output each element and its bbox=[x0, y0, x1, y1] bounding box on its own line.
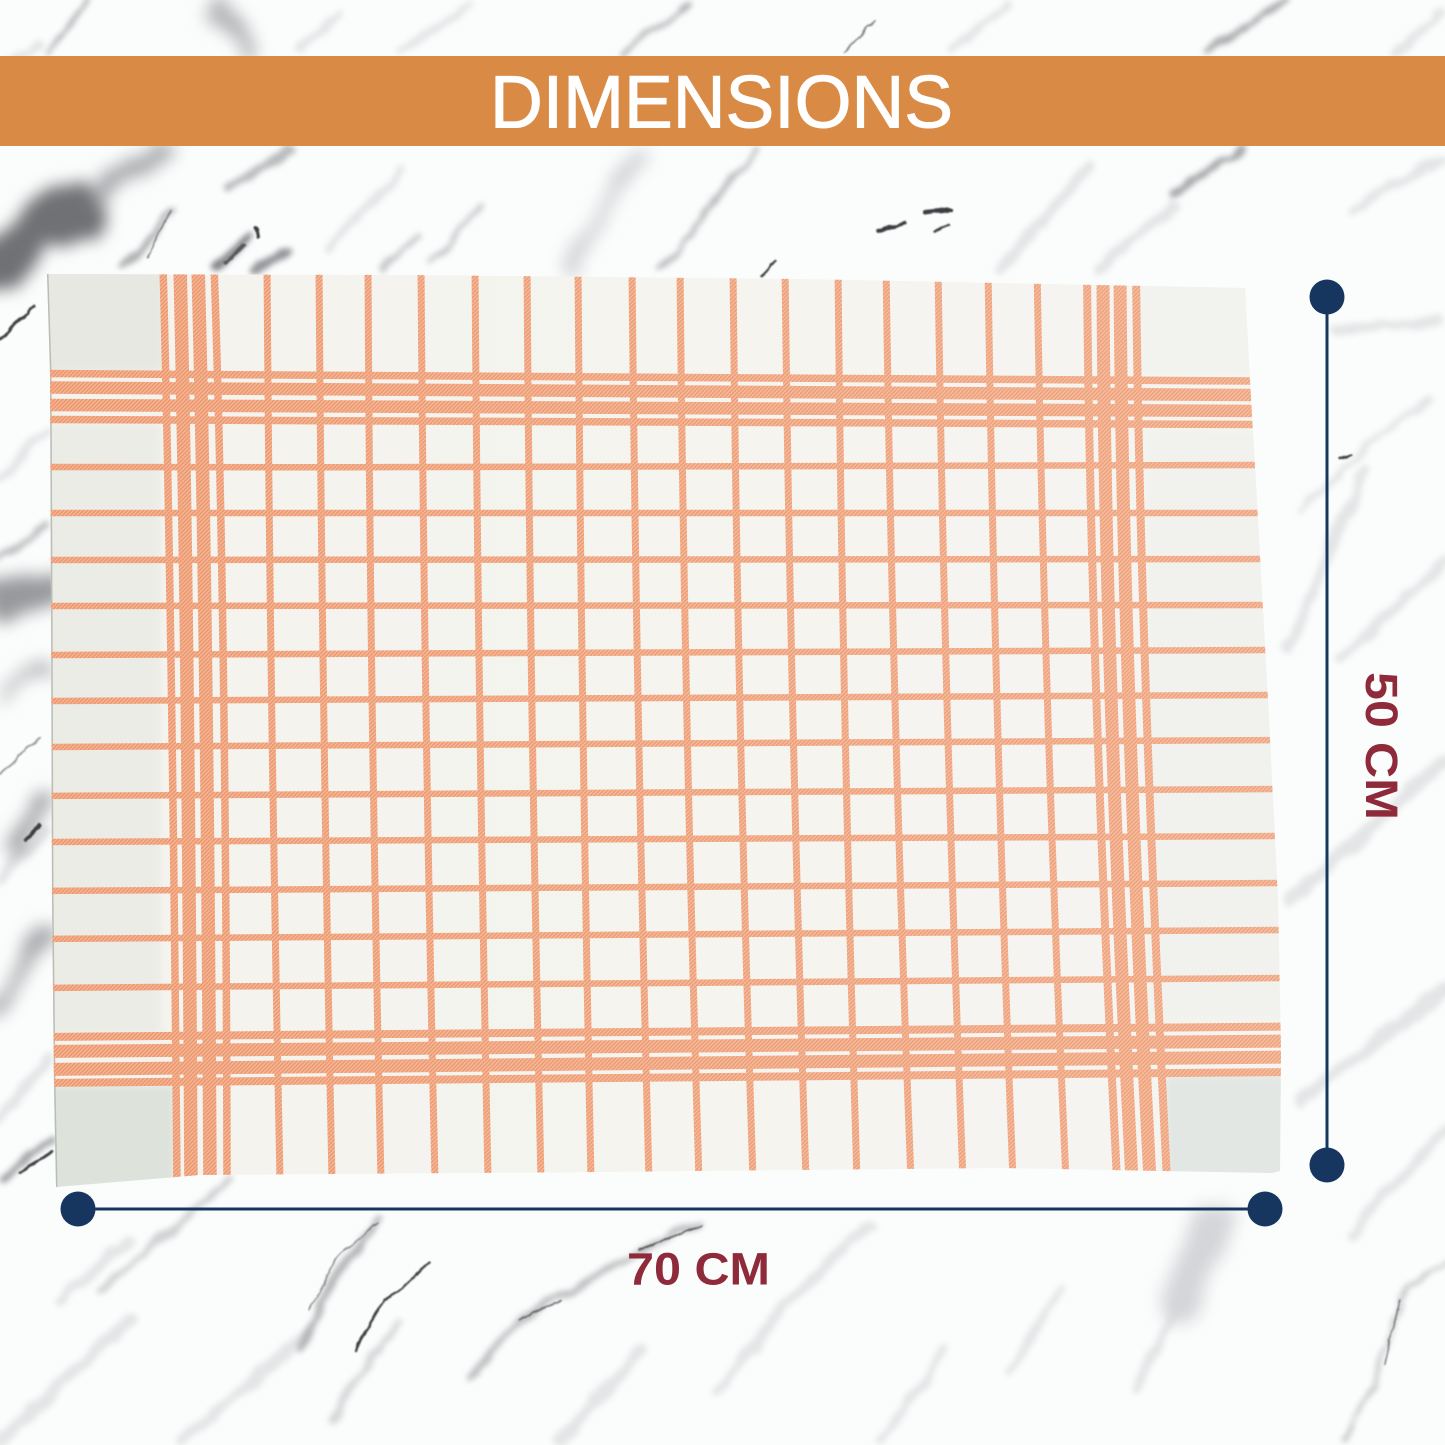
kitchen towel with orange check pattern bbox=[30, 260, 1300, 1205]
width dimension line bbox=[60, 1192, 1282, 1226]
height dimension line bbox=[1310, 280, 1344, 1182]
horizontal stripes bbox=[40, 374, 1290, 1083]
left endpoint dot bbox=[60, 1192, 96, 1226]
vertical stripes bbox=[163, 265, 1167, 1185]
bottom endpoint dot bbox=[1310, 1148, 1344, 1182]
right endpoint dot bbox=[1248, 1192, 1282, 1226]
height label: 50 CM bbox=[1356, 672, 1407, 820]
title text: DIMENSIONS bbox=[490, 60, 953, 144]
width label: 70 CM bbox=[627, 1244, 770, 1294]
top endpoint dot bbox=[1310, 280, 1344, 314]
title band bbox=[0, 56, 1445, 146]
